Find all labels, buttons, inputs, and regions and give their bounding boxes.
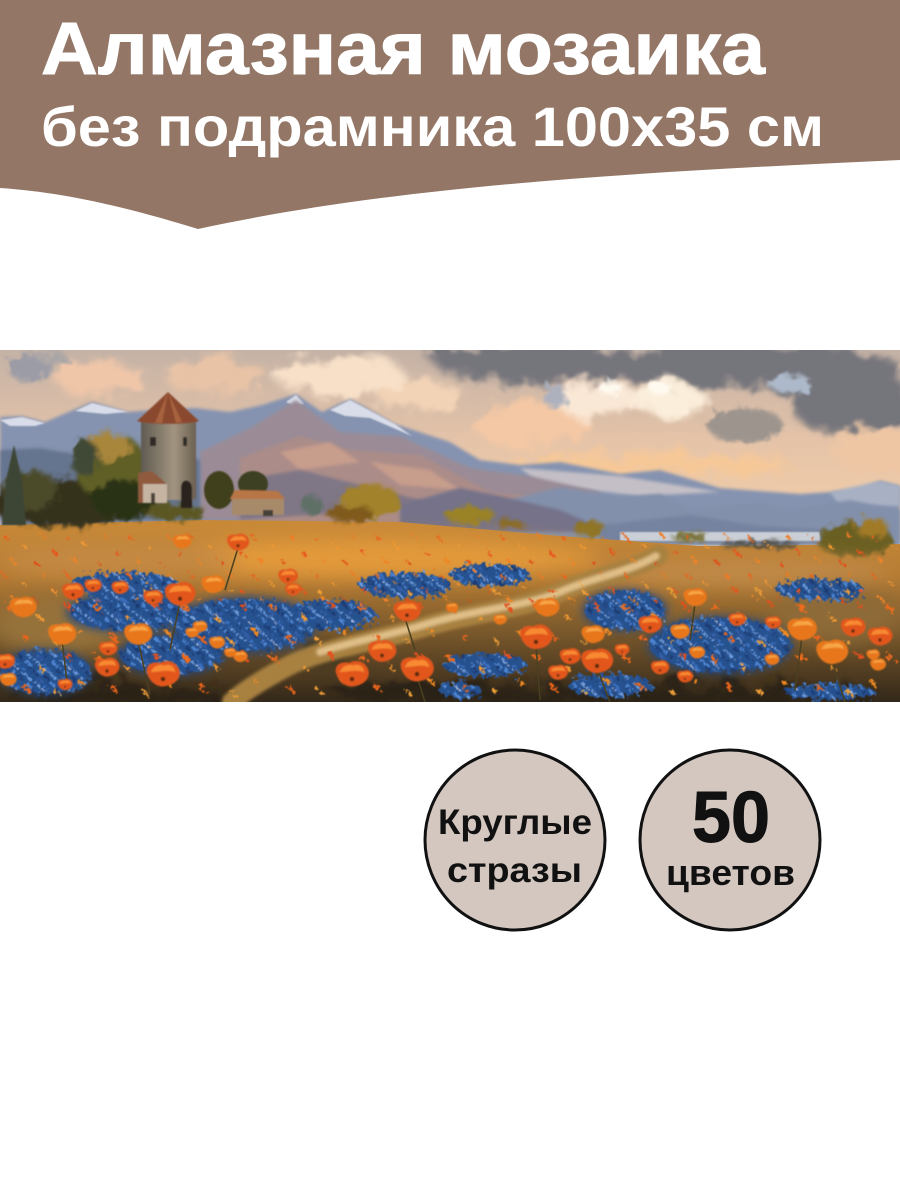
bright clouds <box>55 355 900 477</box>
trees on the left <box>0 433 205 527</box>
circle <box>640 750 820 930</box>
mauve ridges <box>200 400 600 520</box>
cypress <box>2 445 26 525</box>
blue cornflower patches <box>0 564 876 700</box>
circle <box>425 750 605 930</box>
field <box>0 520 900 702</box>
badge: round rhinestones <box>424 748 606 932</box>
title: Алмазная мозаика <box>41 7 766 90</box>
dirt path <box>232 555 658 702</box>
golden field glow <box>0 538 900 655</box>
number: 50 <box>692 778 770 858</box>
windows and door <box>150 437 156 446</box>
snow caps <box>0 395 412 436</box>
soft base <box>0 590 792 694</box>
storm clouds <box>425 338 900 434</box>
grey-blue cloud details <box>8 352 812 442</box>
tower roof <box>137 392 199 424</box>
label line 2: стразы <box>447 851 582 890</box>
side annex <box>138 471 167 503</box>
tower <box>137 392 199 508</box>
subtitle: без подрамника 100х35 см <box>41 95 824 158</box>
speckled flowers <box>0 564 876 700</box>
sky <box>0 338 900 540</box>
painting: poppy field with tower and mountains <box>0 350 900 702</box>
back range <box>0 394 900 545</box>
lake <box>620 532 820 541</box>
distant trees <box>301 484 893 557</box>
blue foreground ridges <box>490 487 900 545</box>
small orange specks across the field <box>0 530 900 702</box>
mountains <box>0 394 900 545</box>
header banner <box>0 0 900 229</box>
label line 1: Круглые <box>438 803 592 842</box>
farmhouse <box>204 471 285 516</box>
tower body <box>141 420 196 500</box>
badge: 50 colours <box>638 748 822 932</box>
banner shape <box>0 0 900 229</box>
dark undergrowth <box>10 645 880 705</box>
poppy stems <box>62 548 845 702</box>
label: цветов <box>666 852 795 893</box>
poppies <box>0 534 892 690</box>
